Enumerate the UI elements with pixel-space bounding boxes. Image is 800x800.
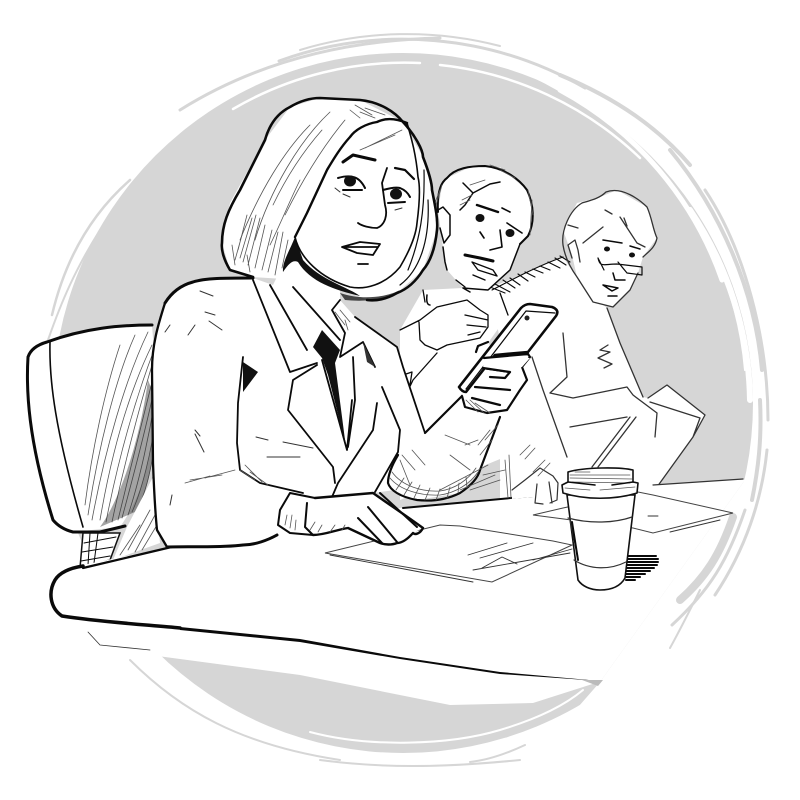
sleeve fold [237, 357, 303, 493]
coffee cup [562, 468, 658, 590]
cup shadow [626, 556, 658, 580]
hair strands [240, 105, 402, 245]
glasses [598, 258, 642, 275]
man with moustache [400, 165, 533, 500]
body [490, 257, 705, 500]
eyes [338, 176, 410, 203]
phone [459, 304, 557, 392]
jacket outline [165, 278, 253, 303]
paper sheets [325, 492, 733, 582]
hand over phone [483, 358, 530, 372]
cuff and hand on table [278, 493, 423, 543]
table [51, 479, 745, 686]
wedge behind elbow [113, 477, 160, 560]
hair shape [222, 98, 437, 300]
collar and lapels [253, 280, 425, 497]
jacket fill [152, 278, 425, 547]
chin shadow [283, 237, 360, 296]
white brush gaps over the circle [58, 38, 750, 743]
hair outline [222, 98, 437, 300]
nose [358, 168, 387, 228]
hand holding phone [462, 342, 530, 413]
man's hand on table [505, 445, 558, 504]
mouth [342, 242, 380, 264]
seat shading [85, 332, 156, 522]
raised sleeve [388, 395, 500, 500]
woman [152, 98, 557, 547]
chair [27, 325, 160, 568]
face fill [295, 122, 418, 287]
man with glasses [490, 190, 705, 500]
chair stem [80, 533, 120, 568]
lid [562, 468, 638, 498]
tie [313, 330, 347, 450]
eyebrows [343, 155, 375, 162]
face hairline [295, 119, 407, 237]
shoulder hatch [490, 256, 570, 293]
body [400, 288, 508, 500]
head [438, 167, 533, 290]
neck fill [273, 240, 345, 372]
head [563, 190, 657, 307]
